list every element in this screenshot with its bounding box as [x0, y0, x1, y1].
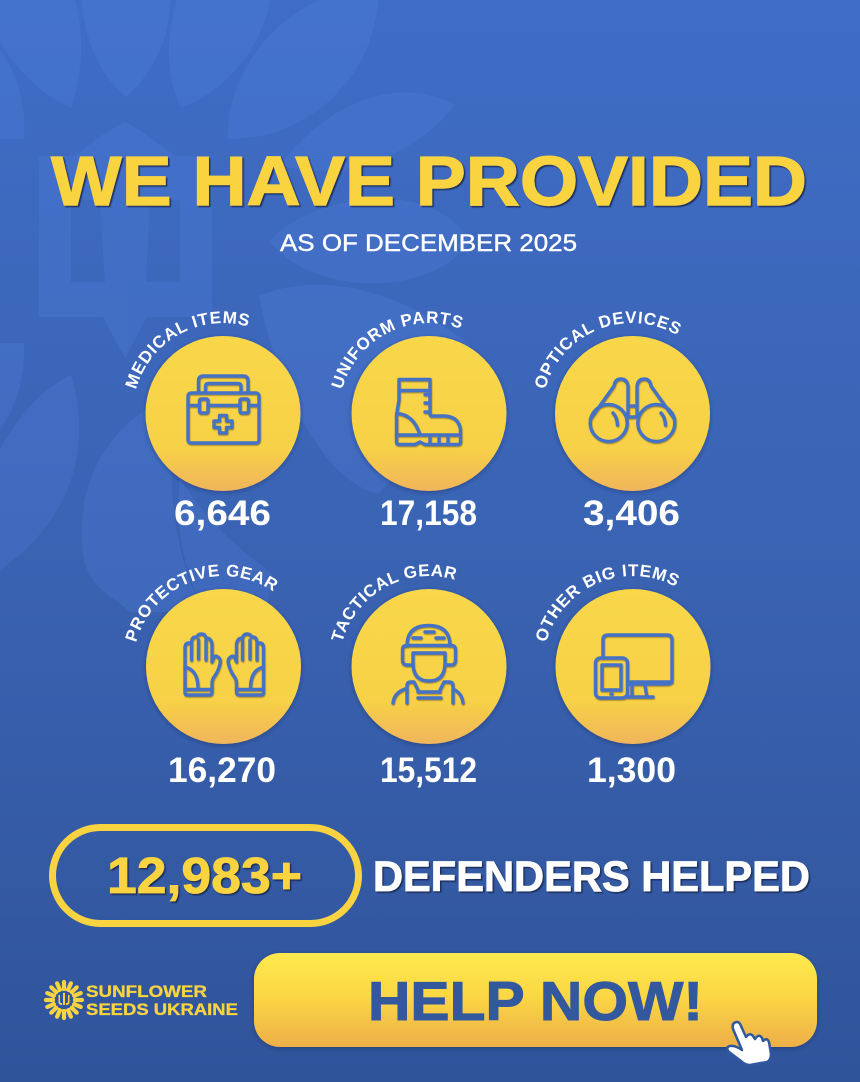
- button: help now: [254, 953, 817, 1047]
- logo text line two: SEEDS UKRAINE: [86, 1001, 238, 1019]
- callout: defenders pill: [52, 828, 358, 924]
- other label: OTHER BIG ITEMS: [536, 564, 679, 641]
- pill value: 12,983+: [107, 847, 302, 904]
- stat: medical items: [125, 311, 302, 533]
- medical circle: [146, 336, 300, 491]
- stat: protective gear: [125, 564, 302, 790]
- subtitle: AS OF DECEMBER 2025: [280, 230, 577, 257]
- defenders helped text: DEFENDERS HELPED: [373, 853, 810, 901]
- other circle: [556, 589, 710, 744]
- other value: 1,300: [587, 751, 676, 790]
- button body: [254, 953, 817, 1047]
- protective value: 16,270: [168, 751, 276, 790]
- icon: devices: [596, 635, 672, 698]
- uniform value: 17,158: [380, 494, 477, 533]
- icon: medical kit: [188, 376, 259, 443]
- medical label: MEDICAL ITEMS: [125, 311, 249, 389]
- stat: uniform parts: [331, 311, 508, 533]
- background sunflower and trident watermark: [0, 0, 470, 612]
- medical value: 6,646: [174, 494, 271, 533]
- logo: [46, 982, 238, 1019]
- icon: sunflower: [46, 982, 82, 1018]
- icon: binoculars: [590, 379, 675, 442]
- pill outline: [52, 828, 358, 924]
- tactical circle: [352, 589, 506, 744]
- title: WE HAVE PROVIDED: [51, 142, 807, 220]
- uniform label: UNIFORM PARTS: [331, 311, 463, 388]
- tactical value: 15,512: [380, 751, 477, 790]
- tactical label: TACTICAL GEAR: [330, 564, 456, 640]
- stat: tactical gear: [330, 564, 508, 790]
- optical value: 3,406: [583, 494, 680, 533]
- icon: soldier: [393, 626, 463, 703]
- logo text line one: SUNFLOWER: [86, 983, 207, 1001]
- button text: HELP NOW!: [368, 970, 703, 1032]
- protective label: PROTECTIVE GEAR: [125, 564, 278, 642]
- uniform circle: [352, 336, 506, 491]
- optical circle: [555, 336, 710, 491]
- stat: other big items: [536, 564, 712, 790]
- optical label: OPTICAL DEVICES: [535, 311, 681, 388]
- protective circle: [146, 589, 301, 744]
- icon: gloves: [185, 634, 264, 695]
- icon: pointing hand: [727, 1022, 771, 1065]
- icon: boot: [396, 380, 460, 444]
- stat: optical devices: [535, 311, 712, 533]
